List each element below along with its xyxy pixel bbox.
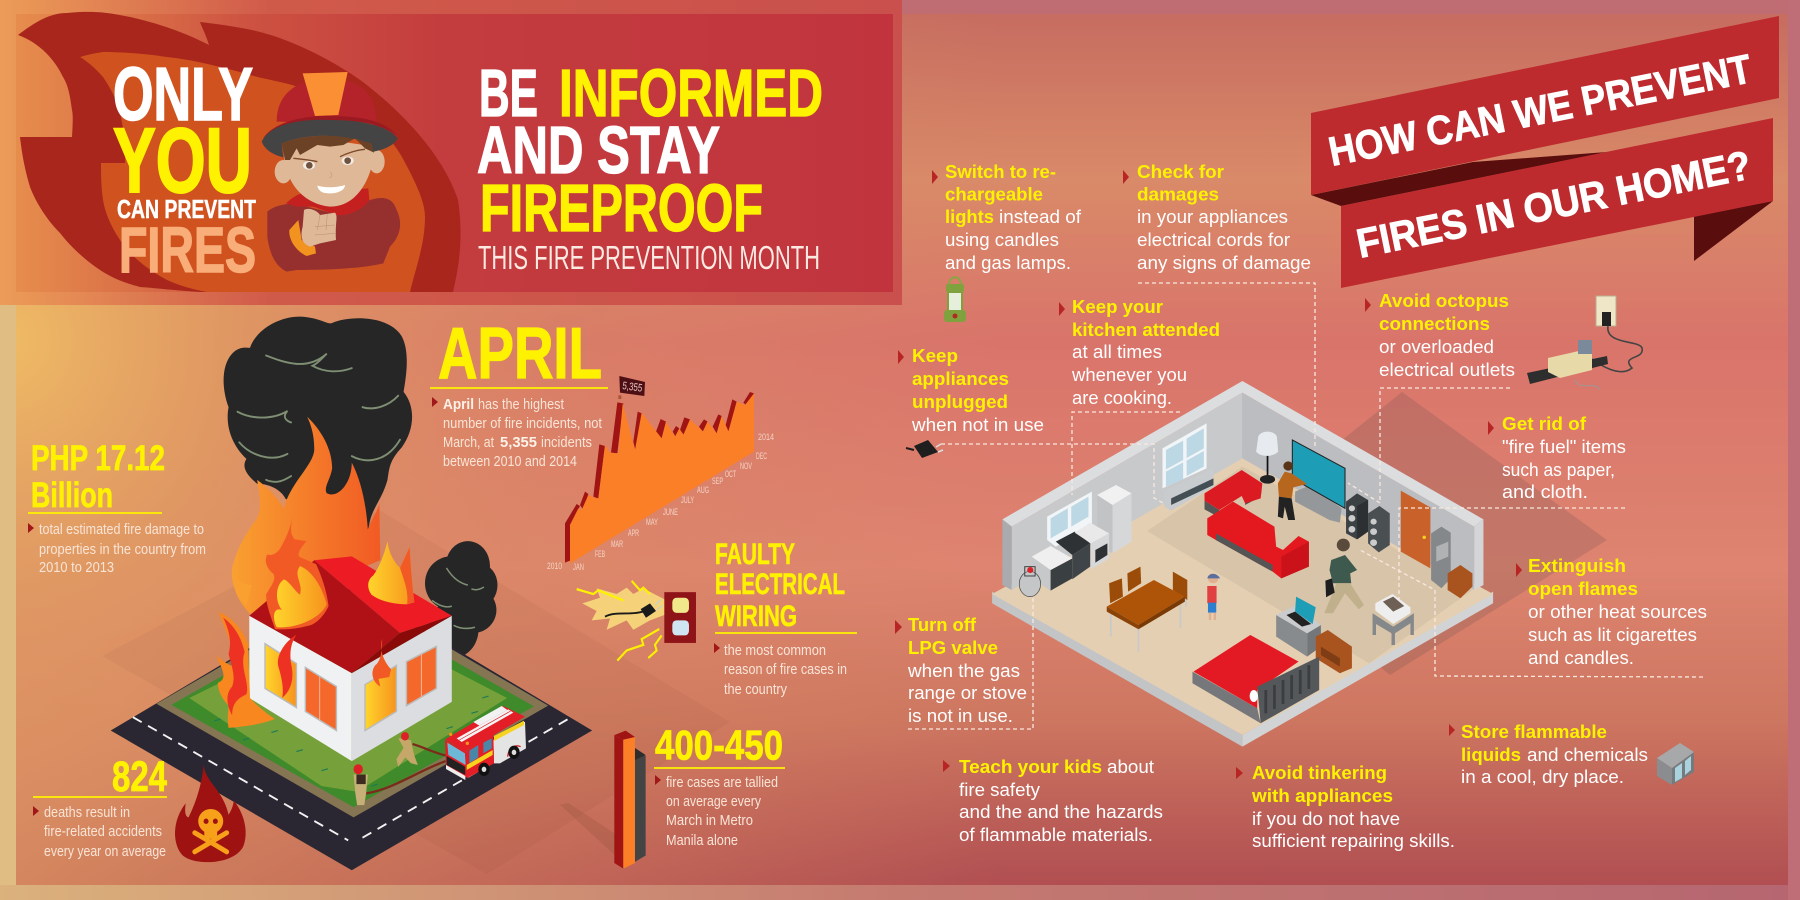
area chart: monthly fire incidents: OCT [725, 469, 736, 479]
stat: april: 5,355 [500, 435, 537, 451]
stat: damage: 2010 to 2013 [39, 560, 114, 576]
tip: check damages: any signs of damage [1137, 253, 1311, 273]
area chart: monthly fire incidents: 5,355 [622, 380, 643, 395]
icon: 3d bar [560, 731, 646, 869]
stat: 400-450: March in Metro [666, 813, 753, 829]
tip: check damages: in your appliances [1137, 207, 1288, 227]
stat: faulty wiring [714, 538, 857, 698]
tip: teach kids: Teach your kids [959, 757, 1102, 777]
tip: tinkering: Avoid tinkering [1252, 763, 1387, 783]
area chart: monthly fire incidents: MAR [611, 539, 623, 549]
tip: octopus connections: connections [1379, 314, 1490, 334]
room shadow [1221, 392, 1607, 675]
area chart: monthly fire incidents: JULY [681, 495, 694, 505]
headline: FIREPROOF [480, 171, 763, 246]
main flames [232, 417, 380, 614]
stat: damage: PHP 17.12 [31, 439, 165, 478]
area chart: monthly fire incidents: JAN [573, 562, 584, 572]
area chart: monthly fire incidents: MAY [646, 517, 658, 527]
tip: flammable liquids [1449, 722, 1648, 787]
stat: april [430, 314, 608, 470]
tip: teach kids [943, 757, 1163, 845]
slogan: only you can prevent fires: ONLY [113, 52, 253, 136]
headline: AND STAY [477, 113, 720, 188]
area chart: monthly fire incidents: 2014 [758, 432, 774, 442]
tip: check damages: damages [1137, 184, 1219, 204]
tip: lpg valve [895, 615, 1027, 726]
tip: unplug appliances: Keep [912, 346, 958, 366]
stat: faulty wiring: ELECTRICAL [715, 568, 845, 601]
tip: open flames: such as lit cigarettes [1528, 625, 1697, 645]
stat: damage: total estimated fire damage to [39, 522, 204, 538]
child [1207, 573, 1220, 620]
house [249, 556, 452, 761]
door and shelves [1401, 491, 1472, 598]
tip: rechargeable lights: chargeable [945, 184, 1043, 204]
tip: teach kids: fire safety [959, 780, 1040, 800]
tip: flammable liquids: in a cool, dry place. [1461, 767, 1624, 787]
speakers [1346, 493, 1390, 552]
sofas [1205, 470, 1309, 578]
icon: overloaded outlet [1527, 296, 1642, 390]
tip: kitchen: at all times [1072, 342, 1162, 362]
headline [477, 56, 823, 276]
roof and wall flames [216, 514, 414, 728]
stat: april: April [443, 397, 474, 413]
tip: unplug appliances: appliances [912, 369, 1009, 389]
connector lines [908, 283, 1703, 729]
tip: open flames: open flames [1528, 579, 1638, 599]
tip: kitchen: kitchen attended [1072, 320, 1220, 340]
stat: april: incidents [541, 435, 592, 451]
area chart: monthly fire incidents: DEC [756, 451, 767, 461]
stat: 400-450: on average every [666, 794, 762, 810]
ribbon heading: FIRES IN OUR HOME? [1353, 142, 1755, 267]
ribbon heading: HOW CAN WE PREVENT [1325, 45, 1755, 175]
smoke column [224, 317, 412, 532]
tip: tinkering: if you do not have [1252, 809, 1400, 829]
flame backdrop [18, 12, 461, 292]
tip: kitchen: whenever you [1071, 365, 1187, 385]
stat: damage: properties in the country from [39, 542, 206, 558]
tip: fire fuel [1488, 414, 1626, 502]
tip: open flames: Extinguish [1528, 556, 1626, 576]
brown shelf [1316, 630, 1352, 673]
tip: octopus connections: Avoid octopus [1379, 291, 1509, 311]
stat: april: number of fire incidents, not [443, 416, 602, 432]
stat: 400-450: 400-450 [655, 722, 783, 768]
icon: storage cabinet [1657, 743, 1694, 785]
tip: check damages: electrical cords for [1137, 230, 1290, 250]
icon: lantern [944, 277, 966, 322]
small smoke cloud [425, 541, 497, 658]
slogan: only you can prevent fires [113, 52, 256, 286]
headline: INFORMED [559, 56, 823, 131]
icon: skull in flame [175, 765, 246, 862]
icon: sparking outlet [577, 581, 696, 661]
walls [1002, 381, 1483, 590]
area chart: monthly fire incidents: NOV [740, 461, 752, 471]
tip: rechargeable lights: instead of [999, 207, 1082, 227]
tip: kitchen: are cooking. [1072, 388, 1172, 408]
tip: rechargeable lights: Switch to re- [945, 162, 1056, 182]
tip: flammable liquids: Store flammable [1461, 722, 1607, 742]
area chart: monthly fire incidents [547, 376, 774, 572]
stat: 400-450: fire cases are tallied [666, 775, 778, 791]
stoves [1032, 523, 1109, 591]
stat: april: has the highest [478, 397, 564, 413]
ground: road and lawn [111, 587, 592, 870]
stat: damage [28, 439, 206, 576]
tip: teach kids: and the and the hazards [959, 802, 1163, 822]
person at tv [1278, 461, 1307, 520]
tip: lpg valve: is not in use. [908, 706, 1013, 726]
tip: fire fuel: and cloth. [1502, 482, 1588, 502]
floor lamp [1256, 432, 1278, 484]
area chart: monthly fire incidents: FEB [595, 549, 605, 559]
tip: teach kids: of flammable materials. [959, 825, 1153, 845]
desk with laptop [1276, 597, 1321, 657]
headline: THIS FIRE PREVENTION MONTH [478, 239, 820, 276]
tip: kitchen [1059, 297, 1220, 408]
stat: faulty wiring: FAULTY [715, 538, 795, 571]
stat: deaths: 824 [112, 753, 167, 801]
stat: faulty wiring: WIRING [715, 600, 797, 633]
tip: kitchen: Keep your [1072, 297, 1163, 317]
stat: 400-450: Manila alone [666, 833, 738, 849]
bed [1192, 635, 1319, 723]
tip: check damages: Check for [1137, 162, 1224, 182]
tip: fire fuel: such as paper, [1502, 460, 1615, 480]
stat: deaths: deaths result in [44, 805, 130, 821]
lpg tank [1019, 567, 1041, 597]
slogan: only you can prevent fires: CAN PREVENT [117, 194, 256, 224]
slogan: only you can prevent fires: YOU [113, 110, 252, 212]
stat: 400-450 [654, 722, 785, 849]
tip: check damages [1123, 162, 1311, 273]
tip: fire fuel: "fire fuel" items [1502, 437, 1626, 457]
tip: rechargeable lights [932, 162, 1082, 273]
tip: flammable liquids: and chemicals [1527, 745, 1648, 765]
area chart: monthly fire incidents: APR [628, 528, 639, 538]
tip: lpg valve: LPG valve [908, 638, 998, 658]
stat: faulty wiring: the country [724, 682, 788, 698]
tip: lpg valve: range or stove [908, 683, 1027, 703]
headline: BE [479, 56, 538, 131]
tip: rechargeable lights: and gas lamps. [945, 253, 1071, 273]
tip: tinkering: sufficient repairing skills. [1252, 831, 1455, 851]
stat: april: between 2010 and 2014 [443, 454, 577, 470]
fire truck [445, 706, 526, 780]
tip: unplug appliances: when not in use [911, 415, 1044, 435]
stat: deaths: every year on average [44, 844, 166, 860]
firefighters with hose [354, 732, 446, 805]
windows and ac unit [1047, 423, 1213, 547]
stat: deaths: fire-related accidents [44, 824, 162, 840]
illustration: burning house [111, 317, 592, 870]
tip: tinkering: with appliances [1251, 786, 1393, 806]
paper on stool [1373, 594, 1414, 645]
area chart: monthly fire incidents: JUNE [663, 507, 678, 517]
area chart: monthly fire incidents: 2010 [547, 561, 562, 571]
tip: fire fuel: Get rid of [1502, 414, 1587, 434]
stat: april: APRIL [438, 314, 602, 394]
tip: unplug appliances [898, 346, 1044, 435]
dining table [1107, 567, 1187, 652]
stat: damage: Billion [31, 476, 113, 515]
tip: octopus connections [1365, 291, 1515, 380]
slogan: only you can prevent fires: FIRES [119, 214, 256, 286]
tip: teach kids: about [1107, 757, 1154, 777]
tip: rechargeable lights: lights [945, 207, 994, 227]
fridge [1097, 485, 1132, 553]
isometric room [992, 381, 1493, 747]
stat: april: March, at [443, 435, 494, 451]
tip: octopus connections: electrical outlets [1379, 360, 1515, 380]
tip: octopus connections: or overloaded [1379, 337, 1494, 357]
area chart: monthly fire incidents: AUG [697, 485, 709, 495]
area chart: monthly fire incidents: SEP [712, 476, 723, 486]
floor slab [992, 457, 1493, 747]
tip: flammable liquids: liquids [1461, 745, 1521, 765]
stat: deaths [33, 753, 167, 860]
stat: faulty wiring: the most common [724, 643, 826, 659]
tip: open flames: or other heat sources [1528, 602, 1707, 622]
tip: lpg valve: Turn off [908, 615, 977, 635]
tip: unplug appliances: unplugged [912, 392, 1008, 412]
stat: faulty wiring: reason of fire cases in [724, 662, 847, 678]
ribbon heading [1311, 16, 1779, 288]
tip: lpg valve: when the gas [907, 661, 1020, 681]
tv [1292, 440, 1345, 523]
tip: rechargeable lights: using candles [945, 230, 1059, 250]
tip: open flames [1516, 556, 1707, 668]
tip: tinkering [1236, 763, 1455, 851]
tip: open flames: and candles. [1528, 648, 1634, 668]
header panel [0, 0, 902, 305]
walking man [1324, 539, 1364, 613]
icon: plug [906, 440, 943, 458]
firefighter mascot [262, 72, 400, 272]
